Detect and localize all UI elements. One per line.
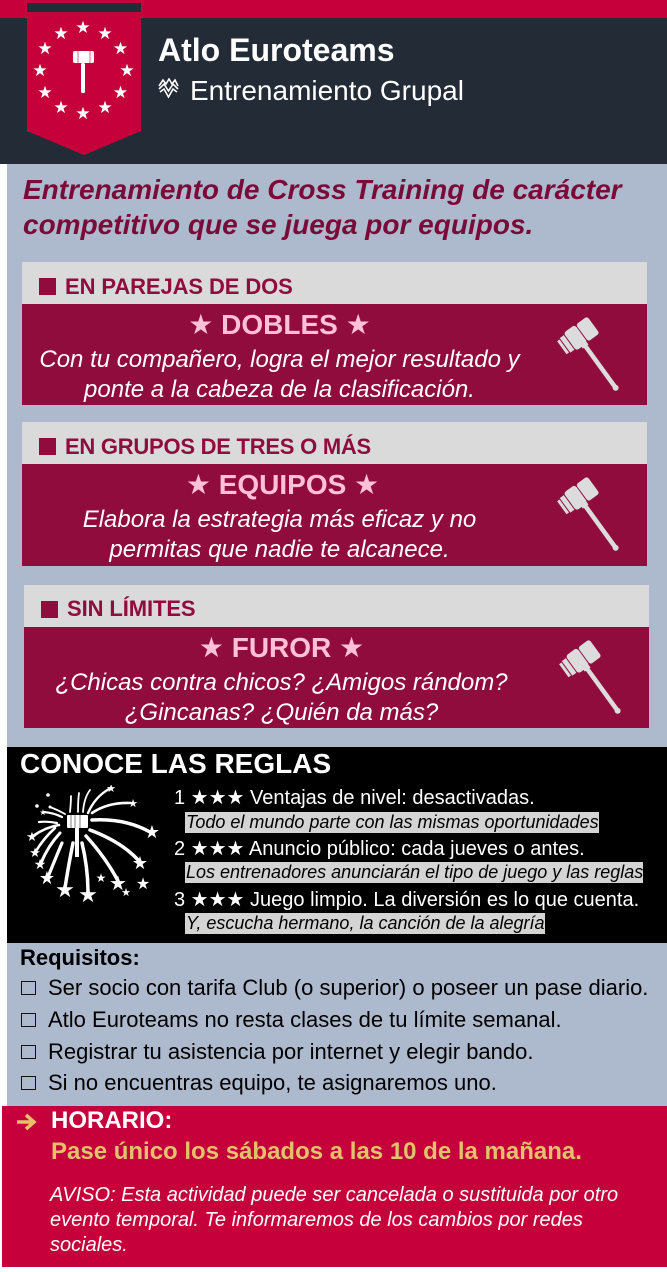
header band xyxy=(0,0,667,164)
rule 3: 3 ★★★ Juego limpio. La diversión es lo que cuenta. xyxy=(174,889,639,911)
icon: firework gavel: ★ xyxy=(39,868,55,889)
panel: equipos xyxy=(22,422,647,566)
icon: banner with stars and gavel: ★ xyxy=(75,104,91,124)
rule 3 note: Y, escucha hermano, la canción de la alegría xyxy=(186,913,545,933)
header title: Atlo Euroteams xyxy=(158,32,394,68)
icon: firework gavel: ★ xyxy=(132,853,148,874)
requirement 3: Registrar tu asistencia por internet y elegir bando. xyxy=(48,1039,533,1064)
icon: firework gavel: ★ xyxy=(121,886,131,899)
icon: firework gavel xyxy=(27,785,160,907)
requisitos section xyxy=(20,945,648,1095)
icon: banner with stars and gavel: ★ xyxy=(97,98,113,118)
card: dobles: Con tu compañero, logra el mejor resultado y xyxy=(39,346,520,373)
requirement 1: Ser socio con tarifa Club (o superior) o poseer un pase diario. xyxy=(48,975,648,1000)
icon: firework gavel: ★ xyxy=(96,871,106,885)
icon: banner with stars and gavel: ★ xyxy=(53,24,69,44)
icon: firework gavel: ★ xyxy=(136,874,150,893)
heading: requisitos: Requisitos: xyxy=(20,945,140,970)
panel: page background xyxy=(7,164,667,1106)
notice text: evento temporal. Te informaremos de los cambios por redes xyxy=(50,1209,583,1231)
panel: conoce las reglas xyxy=(7,747,667,943)
label: en grupos de tres o más xyxy=(22,422,647,464)
card: dobles: ★ DOBLES ★ xyxy=(188,309,371,340)
notice text xyxy=(49,1184,618,1256)
icon: banner with stars and gavel: ★ xyxy=(37,39,53,59)
icon: banner with stars and gavel: ★ xyxy=(119,61,135,81)
heading: horario: HORARIO: xyxy=(51,1107,172,1134)
top red stripe xyxy=(0,0,667,18)
icon: firework gavel: ★ xyxy=(55,878,75,903)
icon: banner with stars and gavel: ★ xyxy=(32,61,48,81)
label: en grupos de tres o más: EN GRUPOS DE TRES O MÁS xyxy=(65,434,371,459)
icon: banner with stars and gavel: ★ xyxy=(37,83,53,103)
rules list xyxy=(174,787,643,934)
icon: banner with stars and gavel: ★ xyxy=(53,98,69,118)
icon: firework gavel: ★ xyxy=(144,822,160,843)
icon: firework gavel: ★ xyxy=(34,857,46,873)
label: sin límites xyxy=(24,585,649,627)
card: furor xyxy=(24,627,649,728)
icon: firework gavel: ★ xyxy=(109,871,127,895)
card: equipos: Elabora la estrategia más eficaz y no xyxy=(83,506,476,533)
icon: banner with stars and gavel: ★ xyxy=(97,24,113,44)
icon: firework gavel: ★ xyxy=(128,797,138,810)
rule 2 note: Los entrenadores anunciarán el tipo de juego y las reglas xyxy=(186,862,643,882)
icon: firework gavel: ★ xyxy=(39,808,47,817)
panel: horario xyxy=(2,1106,667,1267)
card: furor: ★ FUROR ★ xyxy=(199,632,364,663)
requirement 4: Si no encuentras equipo, te asignaremos uno. xyxy=(48,1070,497,1095)
icon: firework gavel: ★ xyxy=(29,846,41,861)
icon: banner with stars and gavel: ★ xyxy=(113,83,128,103)
card: furor: ¿Gincanas? ¿Quién da más? xyxy=(125,698,438,726)
schedule text: Pase único los sábados a las 10 de la mañana. xyxy=(51,1138,582,1165)
icon: mountain logo xyxy=(158,78,179,98)
label: en parejas de dos xyxy=(22,262,647,304)
card: dobles xyxy=(22,304,647,405)
icon: banner with stars and gavel xyxy=(27,3,141,155)
rule 2: 2 ★★★ Anuncio público: cada jueves o antes. xyxy=(174,838,585,860)
header subtitle: Entrenamiento Grupal xyxy=(190,75,464,106)
panel: dobles xyxy=(22,262,647,405)
requirement 2: Atlo Euroteams no resta clases de tu límite semanal. xyxy=(48,1007,562,1032)
card: furor: ¿Chicas contra chicos? ¿Amigos rándom? xyxy=(55,668,508,696)
card: equipos: ★ EQUIPOS ★ xyxy=(186,469,379,500)
heading: conoce las reglas: CONOCE LAS REGLAS xyxy=(20,748,331,779)
card: equipos: permitas que nadie te alcanece. xyxy=(109,536,450,563)
label: sin límites: SIN LÍMITES xyxy=(67,596,195,621)
label: en parejas de dos: EN PAREJAS DE DOS xyxy=(65,274,293,299)
notice text: sociales. xyxy=(50,1234,128,1256)
card: equipos xyxy=(22,464,647,566)
rule 1: 1 ★★★ Ventajas de nivel: desactivadas. xyxy=(174,787,535,809)
icon: banner with stars and gavel: ★ xyxy=(113,39,128,59)
heading: intro statement: competitivo que se juega por equipos. xyxy=(23,209,533,240)
card: dobles: ponte a la cabeza de la clasificación. xyxy=(84,376,475,403)
panel: furor xyxy=(24,585,649,728)
icon: arrow xyxy=(17,1114,36,1130)
notice text: AVISO: Esta actividad puede ser cancelada o sustituida por otro xyxy=(50,1184,618,1206)
rule 1 note: Todo el mundo parte con las mismas oportunidades xyxy=(186,812,599,832)
heading: intro statement xyxy=(23,174,623,240)
icon: banner with stars and gavel: ★ xyxy=(75,18,91,38)
heading: intro statement: Entrenamiento de Cross Training de carácter xyxy=(23,174,622,205)
